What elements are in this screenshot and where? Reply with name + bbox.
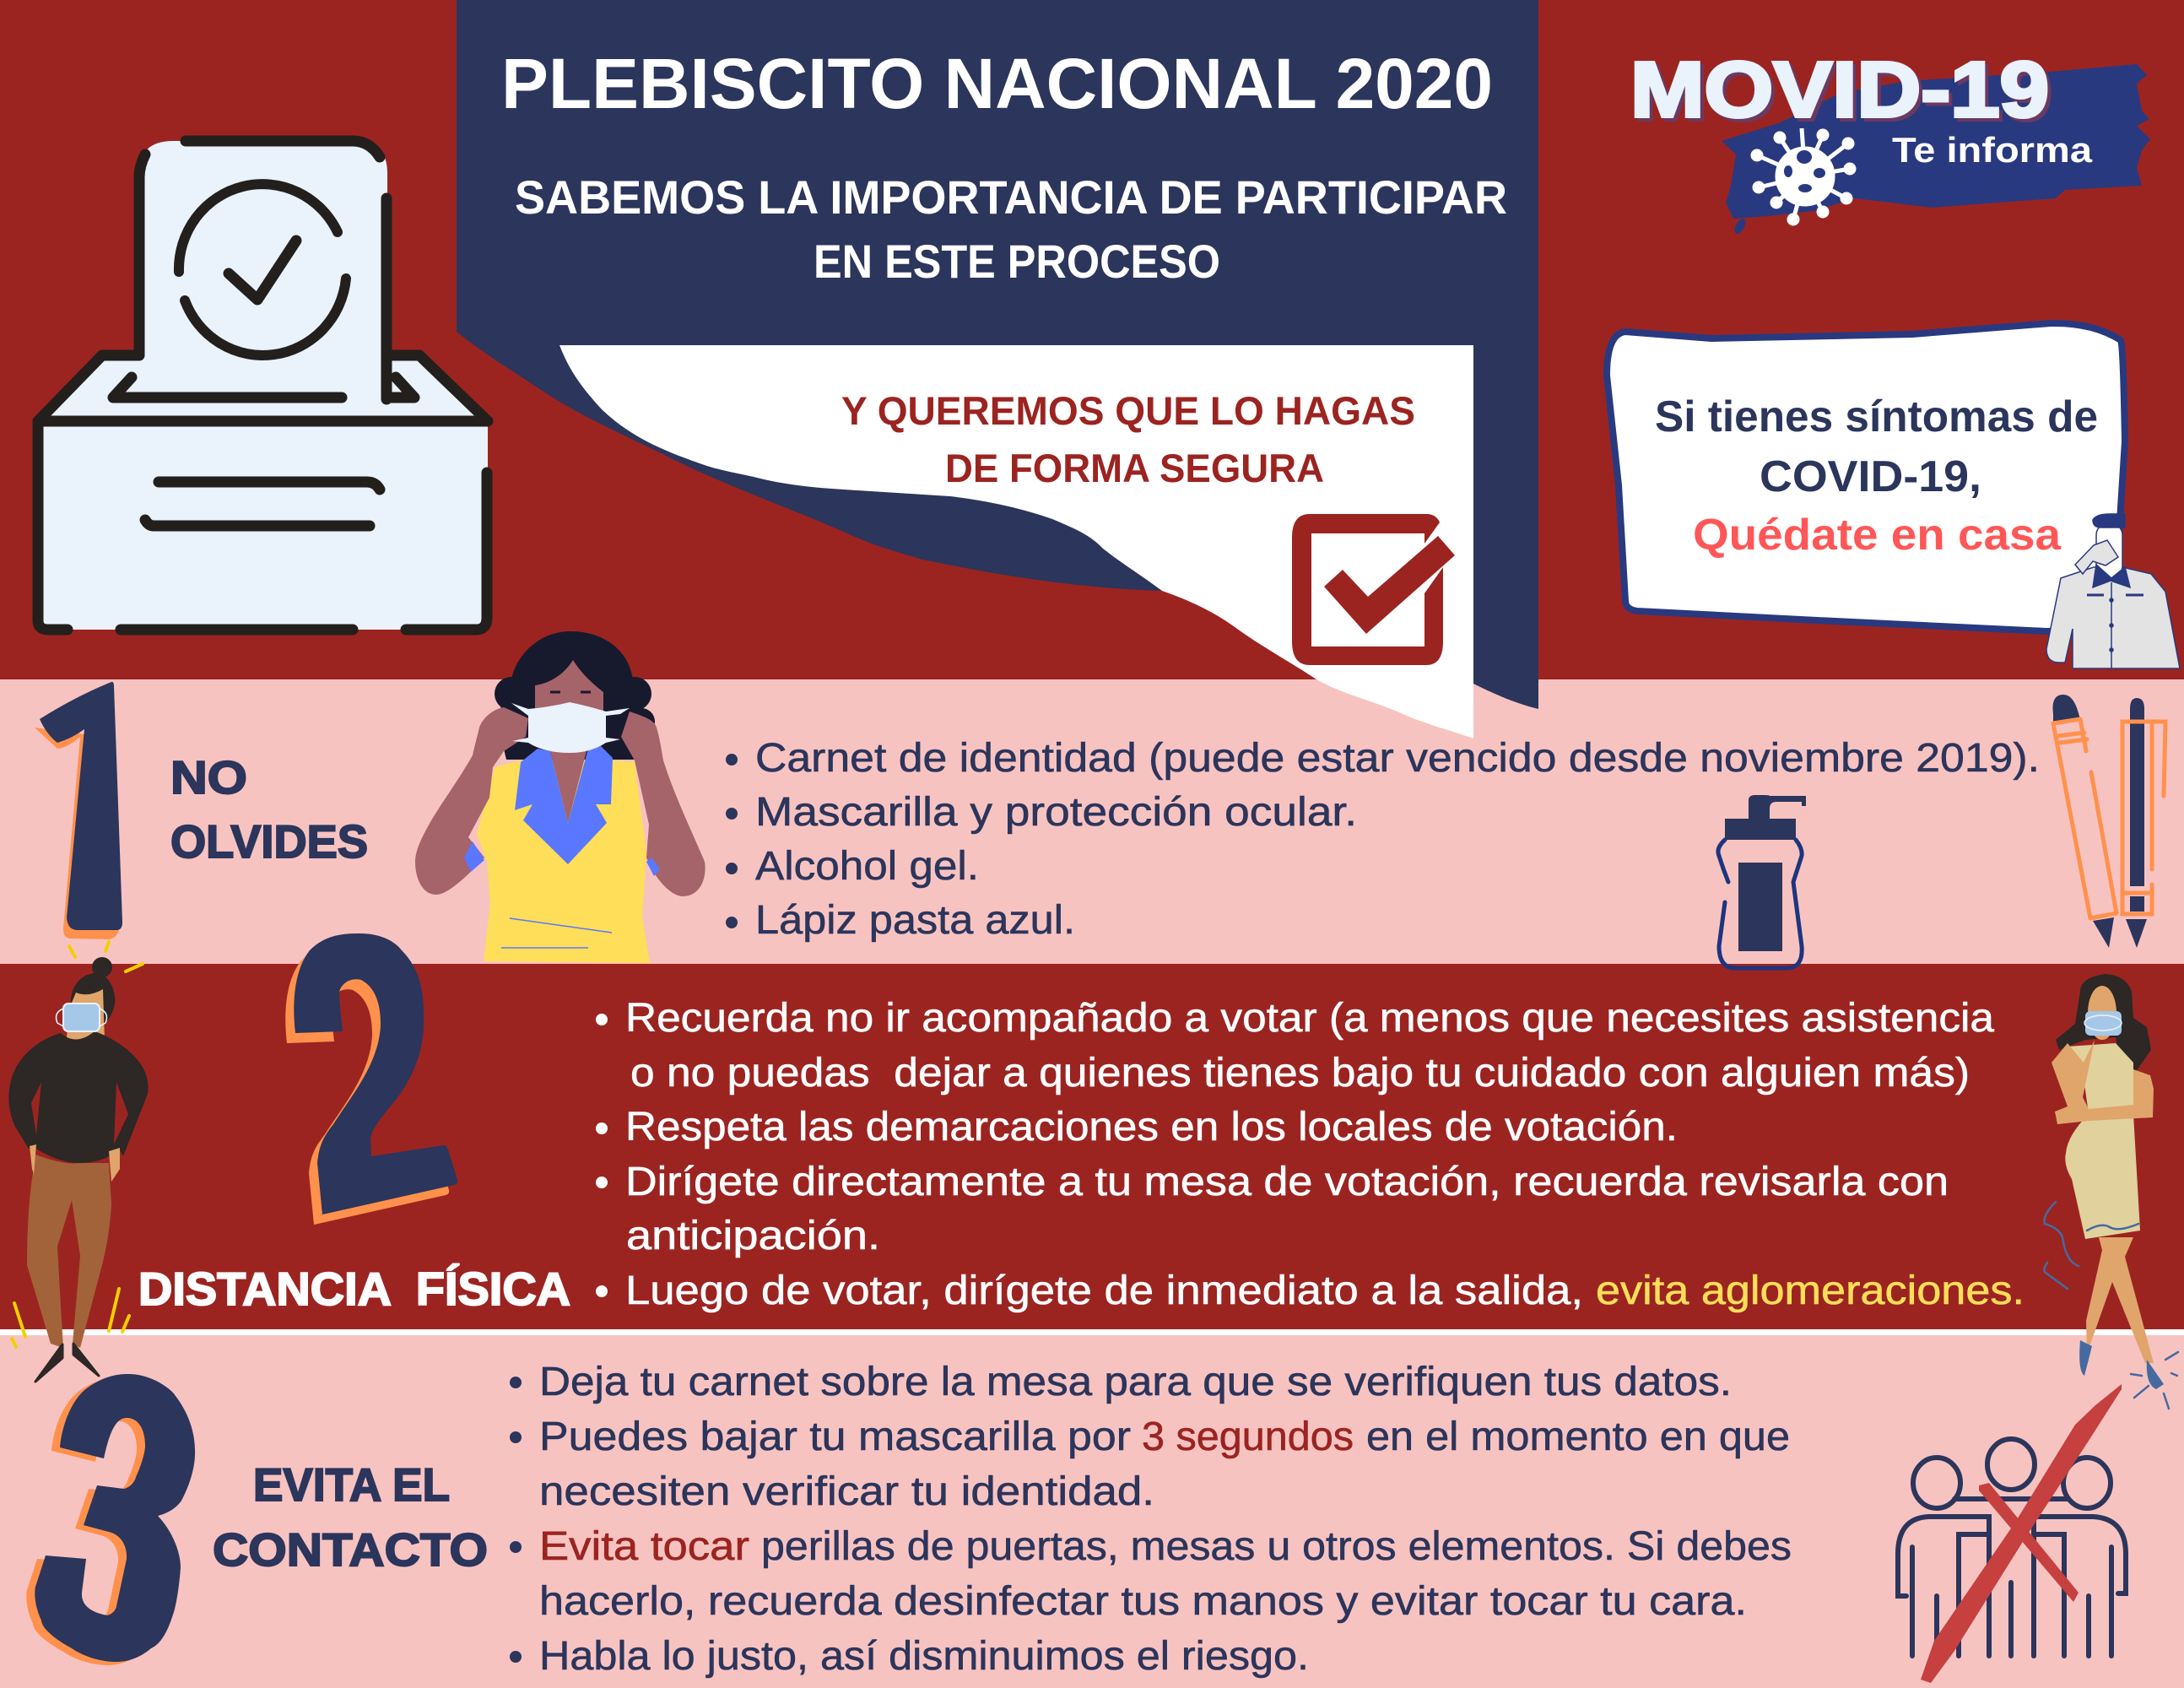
number 3: [26, 1374, 195, 1665]
message: do it safely: [841, 388, 1415, 490]
list: evita el contacto: 3 segundos: [1142, 1415, 1354, 1459]
logo: MOVID-19 Te informa: [1630, 46, 2150, 235]
list: evita el contacto: Habla lo justo, así disminuimos el riesgo.: [539, 1634, 1309, 1679]
band 3 background: [0, 1329, 2184, 1688]
heading: evita el contacto: [213, 1458, 488, 1576]
list: distancia fisica: anticipación.: [626, 1214, 880, 1258]
callout: symptoms: [1607, 323, 2125, 631]
title: PLEBISCITO NACIONAL 2020: [501, 44, 1493, 123]
heading: evita el contacto: CONTACTO: [213, 1523, 488, 1576]
list: distancia fisica: evita aglomeraciones.: [1596, 1269, 2025, 1313]
heading: no olvides: OLVIDES: [170, 815, 368, 868]
heading: evita el contacto: EVITA EL: [253, 1458, 450, 1511]
list: evita el contacto: hacerlo, recuerda desinfectar tus manos y evitar tocar tu cara.: [539, 1579, 1747, 1624]
list: no olvides: [726, 736, 2040, 943]
figure: man with mask: [8, 942, 149, 1382]
list: evita el contacto: en el momento en que: [1366, 1415, 1790, 1459]
band 1 background: [0, 679, 2184, 964]
subtitle: EN ESTE PROCESO: [814, 235, 1220, 288]
figure: man with tissue: [2046, 514, 2180, 668]
callout: symptoms: Si tienes síntomas de: [1655, 392, 2098, 441]
list: evita el contacto: perillas de puertas, mesas u otros elementos. Si debes: [761, 1524, 1792, 1569]
icon: group of people crossed out: [1898, 1384, 2126, 1683]
logo: MOVID-19 Te informa: Te informa: [1892, 130, 2093, 170]
heading: no olvides: NO: [170, 751, 247, 803]
figure: woman putting on mask: [415, 631, 705, 963]
list: evita el contacto: necesiten verificar tu identidad.: [539, 1469, 1154, 1514]
panel: title banner: [457, 0, 1538, 709]
panel: white speech shape: [560, 345, 1473, 738]
icon: ballot box: [38, 141, 488, 630]
callout: symptoms: Quédate en casa: [1693, 511, 2062, 560]
callout: symptoms: COVID-19,: [1760, 452, 1981, 501]
heading: no olvides: [170, 751, 368, 868]
subtitle: SABEMOS LA IMPORTANCIA DE PARTICIPAR: [515, 170, 1507, 224]
icon: checkbox: [1292, 514, 1455, 665]
logo: MOVID-19 Te informa: MOVID-19: [1630, 46, 2049, 133]
list: evita el contacto: Deja tu carnet sobre la mesa para que se verifiquen tus datos.: [539, 1360, 1732, 1404]
figure: woman with mask: [2044, 974, 2178, 1409]
list: evita el contacto: Puedes bajar tu mascarilla por: [539, 1415, 1131, 1459]
list: distancia fisica: Recuerda no ir acompañado a votar (a menos que necesites asistencia: [625, 996, 1994, 1041]
list: evita el contacto: [510, 1360, 1792, 1679]
list: distancia fisica: Dirígete directamente a tu mesa de votación, recuerda revisarla con: [625, 1160, 1949, 1204]
list: no olvides: Carnet de identidad (puede estar vencido desde noviembre 2019).: [755, 736, 2040, 781]
list: distancia fisica: Respeta las demarcaciones en los locales de votación.: [625, 1105, 1678, 1150]
subtitle: [515, 170, 1507, 288]
message: do it safely: Y QUEREMOS QUE LO HAGAS: [841, 388, 1415, 433]
icon: pencil: [2052, 695, 2116, 948]
message: do it safely: DE FORMA SEGURA: [945, 446, 1324, 490]
list: no olvides: Lápiz pasta azul.: [755, 898, 1075, 943]
number 1: [35, 682, 122, 939]
list: distancia fisica: [596, 996, 2025, 1313]
icon: alcohol gel bottle: [1718, 795, 1806, 968]
list: distancia fisica: Luego de votar, dirígete de inmediato a la salida,: [625, 1269, 1583, 1313]
number 2: [285, 933, 457, 1225]
list: no olvides: Mascarilla y protección ocular.: [755, 790, 1357, 835]
list: evita el contacto: Evita tocar: [539, 1524, 749, 1569]
icon: pen: [2122, 698, 2165, 948]
heading: distancia fisica: DISTANCIA FÍSICA: [138, 1263, 570, 1315]
list: distancia fisica: o no puedas dejar a quienes tienes bajo tu cuidado con alguien más): [630, 1051, 1970, 1096]
list: no olvides: Alcohol gel.: [755, 844, 979, 889]
